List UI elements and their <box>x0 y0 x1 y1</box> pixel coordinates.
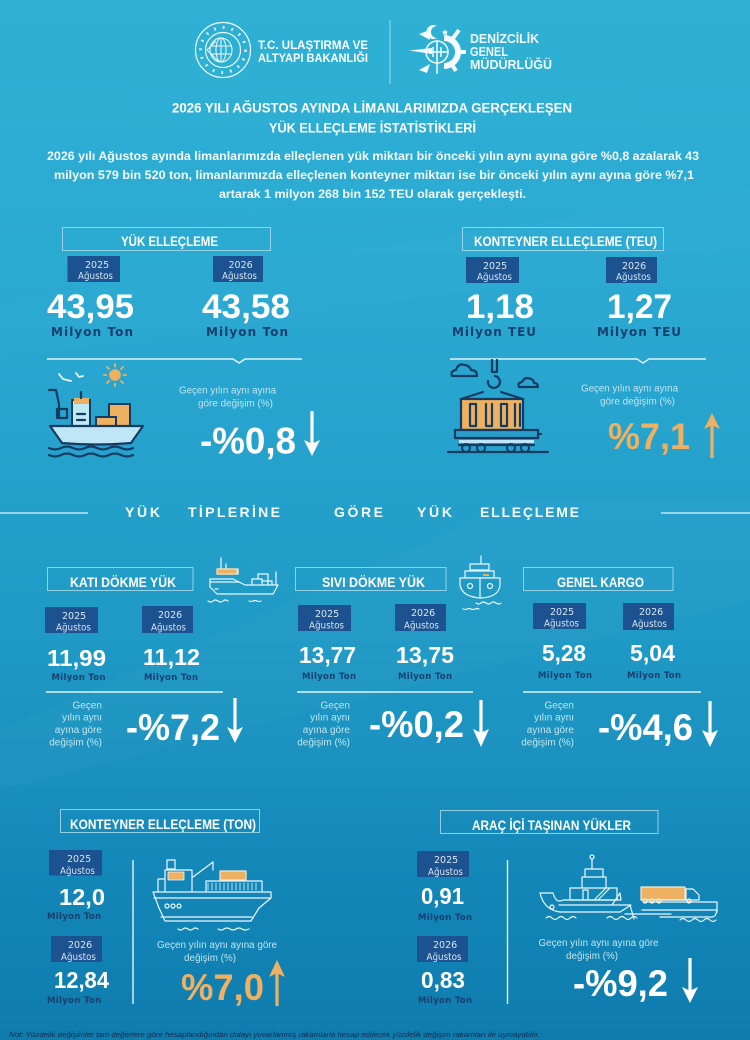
change value: %7,0 <box>181 967 264 1008</box>
heading: GENEL KARGO <box>557 574 644 590</box>
change value <box>573 958 698 1004</box>
2025 value <box>45 607 106 683</box>
panel: katı dökme yük <box>45 558 278 748</box>
2025 value: Ağustos <box>56 622 91 634</box>
2026 value <box>395 604 454 682</box>
2025 value <box>298 605 356 682</box>
2025 value: 2025 <box>85 260 109 271</box>
2026 value: 5,04 <box>630 640 675 666</box>
change caption: yılın aynı <box>62 712 102 724</box>
change caption: Geçen yılın aynı ayına <box>179 386 276 396</box>
change caption: değişim (%) <box>521 738 574 748</box>
change caption <box>521 700 574 748</box>
icon: container ship <box>153 860 271 930</box>
2026 value: Ağustos <box>61 952 96 963</box>
directorate name: MÜDÜRLÜĞÜ <box>470 57 552 72</box>
2026 value: Milyon Ton <box>627 671 681 681</box>
intro paragraph: 2026 yılı Ağustos ayında limanlarımızda elleçlenen yük miktarı bir önceki yılın aynı ayına göre %0,8 azalarak 43 <box>47 149 699 163</box>
change value: -%9,2 <box>573 963 668 1004</box>
arrow up <box>704 413 720 458</box>
change caption <box>538 938 659 962</box>
title: 2026 YILI AĞUSTOS AYINDA LİMANLARIMIZDA GERÇEKLEŞEN <box>172 100 572 116</box>
2025 value <box>533 603 592 681</box>
2026 value: Milyon Ton <box>144 673 198 683</box>
icon: cargo ship with sun <box>49 364 143 456</box>
change caption: Geçen yılın aynı ayına göre <box>538 938 659 949</box>
ministry name <box>258 40 368 65</box>
2025 value: 12,0 <box>59 884 105 910</box>
2025 value: 43,95 <box>47 288 134 326</box>
2025 value: 2025 <box>67 854 91 865</box>
change value <box>181 960 285 1008</box>
2026 value: Ağustos <box>632 619 667 630</box>
2025 value: 2025 <box>315 609 339 620</box>
2026 value: Milyon Ton <box>418 996 472 1006</box>
2025 value: Milyon Ton <box>538 671 592 681</box>
2026 value: 2026 <box>158 610 182 621</box>
2026 value: Ağustos <box>222 271 257 282</box>
change caption <box>581 384 678 408</box>
2026 value: Milyon TEU <box>597 325 681 339</box>
change caption <box>49 700 102 748</box>
change value: -%7,2 <box>126 707 220 748</box>
2026 value: 2026 <box>411 608 435 619</box>
2026 value <box>47 936 109 1006</box>
2025 value: 5,28 <box>542 640 586 666</box>
arrow down <box>473 700 489 747</box>
panel: konteyner elleçleme TEU <box>448 228 720 458</box>
title: YÜK ELLEÇLEME İSTATİSTİKLERİ <box>269 120 476 136</box>
change caption: ayına göre <box>303 725 350 736</box>
heading: SIVI DÖKME YÜK <box>322 574 425 590</box>
section heading: yük tiplerine göre: ELLEÇLEME <box>480 504 579 520</box>
heading: KONTEYNER ELLEÇLEME (TON) <box>70 816 256 832</box>
arrow up <box>269 960 285 1006</box>
intro paragraph: milyon 579 bin 520 ton, limanlarımızda elleçlenen konteyner miktarı ise bir önceki yılın aynı ayına göre %7,1 <box>54 168 694 182</box>
2026 value: 2026 <box>68 940 92 951</box>
change value <box>200 411 320 462</box>
2026 value <box>597 257 681 339</box>
ministry name: ALTYAPI BAKANLIĞI <box>258 52 368 65</box>
2026 value <box>417 936 472 1006</box>
heading <box>60 810 260 832</box>
2026 value: 1,27 <box>607 288 672 326</box>
change caption: değişim (%) <box>297 738 350 748</box>
2026 value: Milyon Ton <box>398 672 452 682</box>
icon: container on rail wagon <box>448 360 548 452</box>
2026 value: 2026 <box>433 940 457 951</box>
2025 value: Ağustos <box>309 620 344 632</box>
heading <box>296 568 446 590</box>
change caption: Geçen <box>73 700 102 712</box>
2026 value: 0,83 <box>421 967 465 993</box>
heading <box>440 810 658 834</box>
panel: genel kargo <box>521 568 718 748</box>
logo: ministry <box>196 22 368 78</box>
2025 value: Milyon Ton <box>418 913 472 923</box>
heading: KATI DÖKME YÜK <box>70 574 176 590</box>
panel: araç içi taşınan yükler <box>417 810 717 1006</box>
arrow down <box>304 411 320 456</box>
2026 value: 12,84 <box>54 967 109 993</box>
icon: tanker front view <box>460 556 501 610</box>
2025 value: Milyon Ton <box>52 673 106 683</box>
2026 value: 2026 <box>622 261 646 272</box>
heading: ARAÇ İÇİ TAŞINAN YÜKLER <box>472 817 631 833</box>
2026 value <box>623 603 681 681</box>
directorate name: DENİZCİLİK <box>470 31 539 46</box>
change caption: Geçen <box>545 700 574 712</box>
panel: sıvı dökme yük <box>296 556 501 748</box>
2025 value: Milyon Ton <box>302 672 356 682</box>
2025 value: Ağustos <box>78 271 113 282</box>
change value <box>608 413 720 458</box>
change value: -%0,8 <box>200 420 296 462</box>
2025 value: 11,99 <box>47 645 106 671</box>
change caption: değişim (%) <box>49 738 102 748</box>
icon: bulk carrier <box>208 558 278 602</box>
2025 value: Ağustos <box>60 866 95 877</box>
2026 value: 2026 <box>228 260 253 271</box>
2026 value: 13,75 <box>396 642 454 668</box>
section heading: yük tiplerine göre <box>0 504 750 520</box>
change caption: yılın aynı <box>534 712 574 724</box>
change caption: göre değişim (%) <box>600 396 675 408</box>
change caption: ayına göre <box>527 725 574 736</box>
arrow down <box>682 958 698 1003</box>
2025 value: Milyon TEU <box>452 325 536 339</box>
directorate name <box>470 31 552 72</box>
2025 value: 1,18 <box>466 288 534 326</box>
2026 value: Milyon Ton <box>206 325 288 339</box>
footnote: Not: Yüzdelik değişimler tam değerlere göre hesaplandığından dolayı yuvarlanmış rakamlarla hesap edilecek yüzdelik değişim rakamları ile uymayabilir. <box>9 1030 540 1039</box>
panel: konteyner elleçleme ton <box>47 810 285 1008</box>
change caption: Geçen yılın aynı ayına göre <box>157 940 277 951</box>
ministry name: T.C. ULAŞTIRMA VE <box>258 40 368 52</box>
section heading: yük tiplerine göre: GÖRE <box>334 504 383 520</box>
2025 value: 2025 <box>62 611 86 622</box>
panel: yük elleçleme <box>47 228 320 462</box>
change caption: değişim (%) <box>566 951 618 962</box>
2026 value: Ağustos <box>404 620 439 632</box>
arrow down <box>227 698 243 743</box>
2025 value <box>452 257 536 339</box>
change caption: göre değişim (%) <box>198 398 273 410</box>
2025 value <box>47 850 105 922</box>
change caption: Geçen <box>321 700 350 712</box>
heading: KONTEYNER ELLEÇLEME (TEU) <box>474 233 657 249</box>
2026 value: Ağustos <box>426 952 462 963</box>
2025 value: Milyon Ton <box>47 912 101 922</box>
title <box>172 100 572 136</box>
section heading: yük tiplerine göre: TİPLERİNE <box>188 504 280 520</box>
2026 value: Milyon Ton <box>47 996 101 1006</box>
directorate name: GENEL <box>470 45 508 59</box>
change caption: yılın aynı <box>310 712 350 724</box>
heading: YÜK ELLEÇLEME <box>121 233 218 249</box>
2025 value: 2025 <box>434 855 458 866</box>
2026 value: 2026 <box>639 607 663 618</box>
2025 value: Ağustos <box>428 867 463 878</box>
2025 value: Ağustos <box>544 618 579 630</box>
2026 value: Ağustos <box>616 272 651 283</box>
section heading: yük tiplerine göre: YÜK <box>417 504 452 520</box>
change caption <box>157 940 277 964</box>
heading <box>524 568 673 590</box>
2025 value <box>47 256 134 339</box>
change caption: değişim (%) <box>184 953 236 964</box>
heading <box>462 228 664 250</box>
2025 value: 2025 <box>550 607 574 618</box>
heading <box>48 568 193 590</box>
icon: ministry emblem <box>196 22 250 78</box>
intro paragraph <box>47 149 699 201</box>
2025 value: Milyon Ton <box>51 325 133 339</box>
2026 value: Ağustos <box>151 622 186 634</box>
change caption <box>179 386 276 410</box>
change value: -%0,2 <box>369 704 464 745</box>
change value <box>126 698 243 748</box>
change value: %7,1 <box>608 416 690 457</box>
2025 value: 0,91 <box>421 883 464 909</box>
icon: ro-ro ferry and truck <box>540 855 717 922</box>
arrow down <box>702 701 718 747</box>
intro paragraph: artarak 1 milyon 268 bin 152 TEU olarak gerçekleşti. <box>219 187 526 201</box>
2026 value <box>142 606 200 683</box>
2026 value: 11,12 <box>143 644 200 670</box>
change value: -%4,6 <box>598 707 693 748</box>
2025 value <box>417 851 472 923</box>
section heading: yük tiplerine göre: YÜK <box>125 504 160 520</box>
heading <box>62 228 270 250</box>
change caption <box>297 700 350 748</box>
change caption: Geçen yılın aynı ayına <box>581 384 678 394</box>
change caption: ayına göre <box>55 725 102 736</box>
logo: maritime directorate <box>409 25 552 74</box>
2026 value: 43,58 <box>202 288 290 326</box>
icon: ship wheel emblem <box>409 25 466 74</box>
2026 value <box>202 256 290 339</box>
2025 value: Ağustos <box>477 272 512 283</box>
2025 value: 13,77 <box>299 642 356 668</box>
2025 value: 2025 <box>483 261 507 272</box>
